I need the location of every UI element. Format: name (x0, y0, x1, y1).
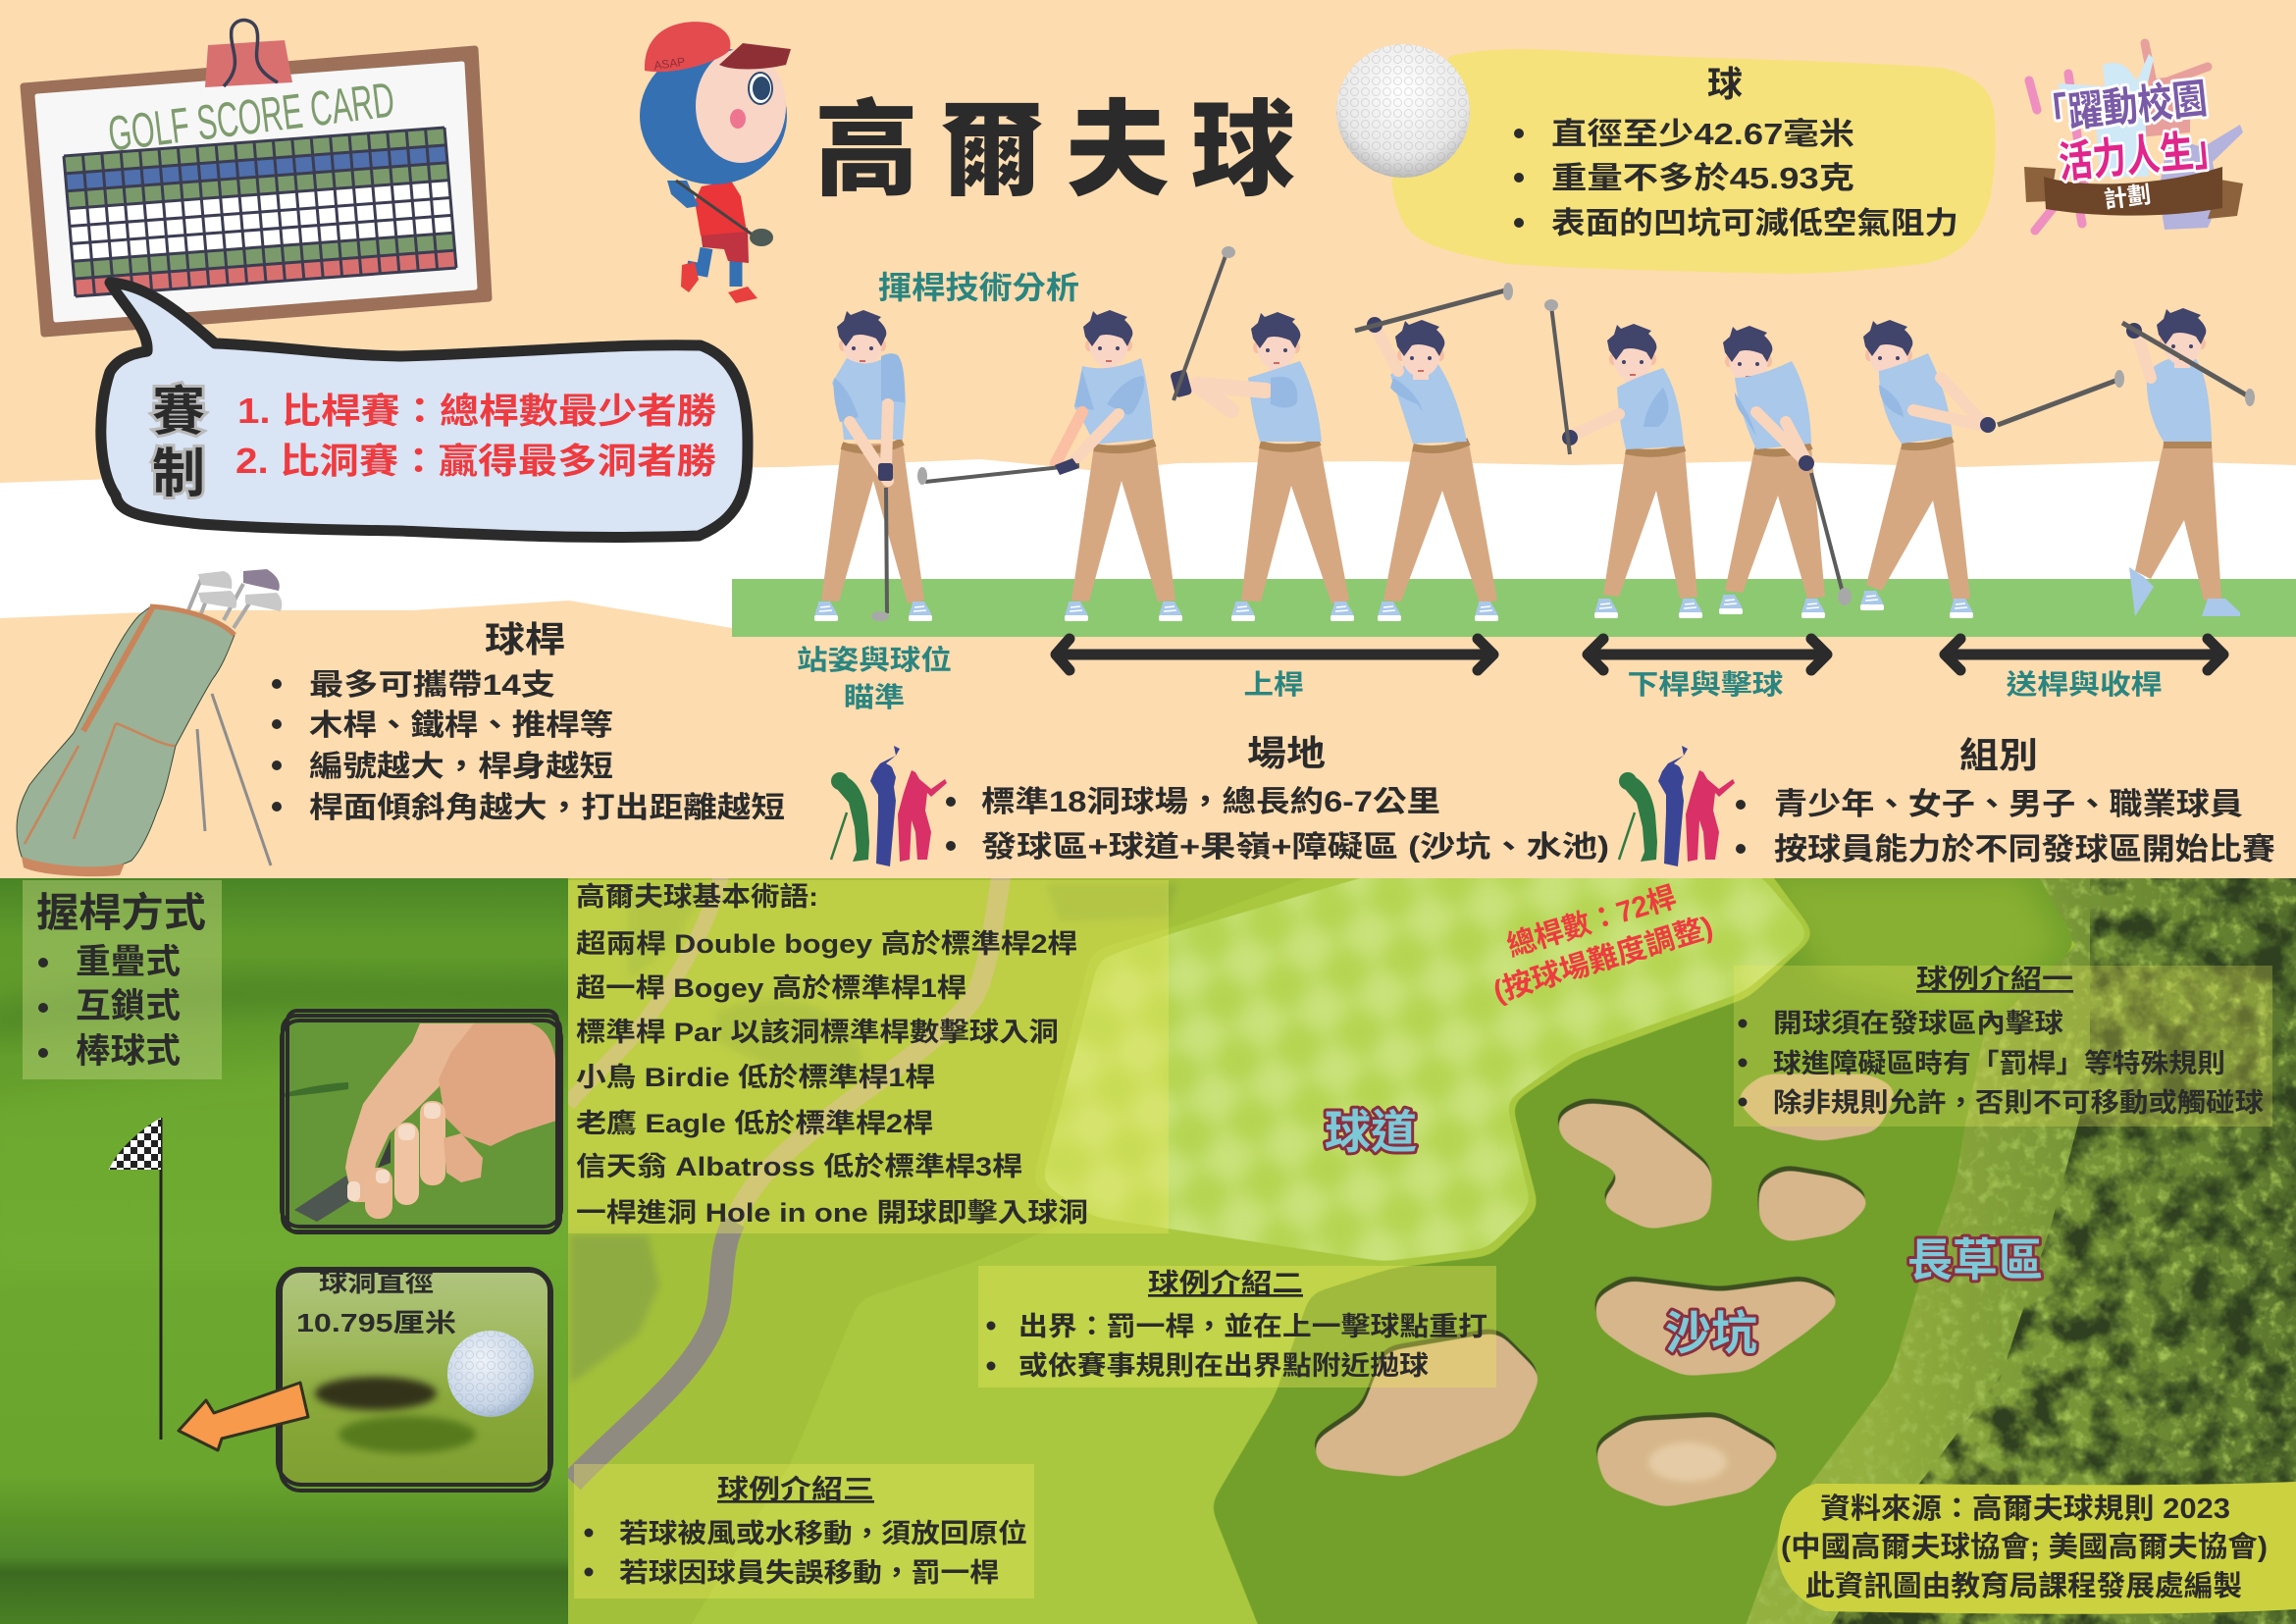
terms: list: 一桿進洞 Hole in one 開球即擊入球洞 (576, 1198, 1088, 1228)
arrow: orange pointer (179, 1383, 308, 1450)
bubble: vertical heading: 賽 (152, 383, 205, 442)
grip: list: 互鎖式 (76, 987, 181, 1025)
categories: list (1736, 787, 2275, 866)
logo: ribbon (2024, 167, 2243, 219)
case 1: heading: 球例介紹一 (1916, 965, 2073, 994)
label: backswing: 上桿 (1244, 669, 1303, 700)
clubs: list: 編號越大，桿身越短 (309, 751, 613, 783)
terms: list: 小鳥 Birdie 低於標準桿1桿 (576, 1063, 935, 1092)
categories: list: 青少年、女子、男子、職業球員 (1774, 787, 2243, 821)
categories: heading: 組別 (1959, 735, 2038, 775)
panel: clubs (272, 619, 785, 824)
ball facts: list: 直徑至少42.67毫米 (1551, 117, 1854, 151)
aerial golf course photo (568, 854, 2296, 1624)
course: list (946, 786, 1609, 864)
aerial: cart path (568, 864, 1003, 1482)
aerial: rough patches (570, 1234, 659, 1384)
label: total strokes: 總桿數：72桿 (1503, 881, 1680, 963)
label: downswing: 下桿與擊球 (1627, 669, 1784, 700)
case 3: list: 若球因球員失誤移動，罰一桿 (619, 1558, 999, 1588)
mascot golfer (640, 22, 791, 303)
arrow: follow-through (1945, 639, 2223, 670)
course: list: 發球區+球道+果嶺+障礙區 (沙坑、水池) (981, 831, 1609, 864)
grip: frame (282, 1011, 561, 1232)
label: fairway: 球道 (1325, 1106, 1417, 1158)
grass strip (732, 579, 2296, 637)
grip: fingers (365, 1168, 392, 1219)
case 1: list: 開球須在發球區內擊球 (1773, 1009, 2063, 1038)
icon: golf bag (17, 569, 282, 876)
source: line 1: 資料來源：高爾夫球規則 2023 (1820, 1493, 2230, 1525)
case 1: list: 球進障礙區時有「罰桿」等特殊規則 (1773, 1049, 2225, 1078)
figure 5: downswing (1544, 299, 1702, 618)
ball facts: list: 表面的凹坑可減低空氣阻力 (1551, 206, 1958, 240)
terms: list: 超兩桿 Double bogey 高於標準桿2桿 (576, 929, 1077, 959)
logo: silhouettes (2029, 43, 2243, 231)
photo: hole diameter (278, 1269, 551, 1491)
terms: list: 標準桿 Par 以該洞標準桿數擊球入洞 (576, 1018, 1059, 1047)
mascot golfer: ASAP (652, 55, 686, 73)
terms: list (576, 929, 1088, 1228)
label: total strokes (1478, 873, 1717, 1009)
case 1: list (1739, 1009, 2264, 1118)
ball facts: yellow blob (1392, 49, 1995, 274)
label: rough: 長草區 (1907, 1234, 2043, 1285)
ball facts: list: 重量不多於45.93克 (1551, 161, 1854, 195)
panel: grip types (23, 880, 222, 1079)
terms: list: 信天翁 Albatross 低於標準桿3桿 (576, 1152, 1022, 1181)
label: stance and aim: 瞄準 (844, 682, 905, 712)
grip: heading: 握桿方式 (36, 890, 206, 935)
panel: rule case 3 (574, 1464, 1034, 1598)
score card: title: GOLF SCORE CARD (105, 72, 397, 162)
grip: list: 棒球式 (76, 1032, 181, 1071)
panel: rule case 2 (978, 1266, 1496, 1388)
grip: list: 重疊式 (76, 943, 181, 981)
categories: list: 按球員能力於不同發球區開始比賽 (1774, 832, 2275, 866)
label: stance and aim: 站姿與球位 (797, 644, 952, 675)
icon: flag (109, 1118, 161, 1440)
course: list: 標準18洞球場，總長約6-7公里 (981, 786, 1440, 818)
score card: clip (205, 20, 292, 87)
score card: grid (64, 128, 456, 296)
grip: list (38, 943, 181, 1071)
case 1: list: 除非規則允許，否則不可移動或觸碰球 (1773, 1087, 2264, 1118)
icon: golfers silhouette (831, 746, 947, 866)
panel: ball facts (1336, 44, 1995, 274)
source: line 2: (中國高爾夫球協會; 美國高爾夫協會) (1781, 1531, 2268, 1563)
terms: list: 超一桿 Bogey 高於標準桿1桿 (576, 973, 966, 1003)
label: bunker: 沙坑 (1665, 1307, 1757, 1359)
bubble: vertical heading: 制 (152, 445, 205, 503)
panel: source note (1777, 1482, 2296, 1614)
figure 7: follow-through (1860, 320, 2124, 618)
logo: programme (2024, 43, 2243, 231)
hole: caption: 球洞直徑 (319, 1270, 434, 1297)
ball facts: list (1514, 117, 1958, 240)
clubs: list: 桿面傾斜角越大，打出距離越短 (309, 792, 785, 824)
grip: left hand (345, 1023, 474, 1202)
figure 8: finish (2122, 308, 2255, 616)
speech bubble: game format (101, 283, 748, 537)
score card: board (24, 49, 489, 334)
heading: swing analysis: 揮桿技術分析 (878, 270, 1079, 305)
course: heading: 場地 (1247, 733, 1326, 773)
aerial: fairway (677, 854, 1815, 1624)
figure 4: top of backswing (1355, 283, 1513, 621)
hole: caption: 10.795厘米 (296, 1308, 456, 1337)
figure 1: stance (814, 310, 932, 621)
case 3: list: 若球被風或水移動，須放回原位 (619, 1518, 1027, 1548)
case 2: heading: 球例介紹二 (1148, 1269, 1303, 1298)
terms: heading: 高爾夫球基本術語: (576, 882, 818, 912)
aerial: forest (1737, 864, 2296, 1624)
aerial: rough around bunkers (1206, 864, 2076, 1624)
panel: score card (24, 20, 489, 334)
case 2: list: 出界：罰一桿，並在上一擊球點重打 (1018, 1312, 1487, 1341)
terms: list: 老鷹 Eagle 低於標準桿2桿 (576, 1109, 933, 1138)
icon: golfers silhouette right (1619, 746, 1735, 866)
left putting green lawn (0, 878, 589, 1624)
logo: plan: 計劃 (2103, 182, 2153, 214)
grip: right hand (439, 1023, 556, 1146)
figure 6: impact (1719, 326, 1852, 618)
grip: club handle (294, 1176, 353, 1222)
panel: course (946, 733, 1609, 864)
case 3: heading: 球例介紹三 (717, 1475, 874, 1504)
panel: categories (1736, 735, 2275, 866)
case 2: list: 或依賽事規則在出界點附近拋球 (1018, 1351, 1429, 1381)
source: line 3: 此資訊圖由教育局課程發展處編製 (1805, 1570, 2242, 1602)
panel: golf terms (568, 880, 1169, 1233)
swing figures (814, 246, 2255, 621)
background: peach and white bands (0, 0, 2296, 883)
bubble: rule 1: 1. 比桿賽：總桿數最少者勝 (237, 391, 716, 431)
label: total strokes: (按球場難度調整) (1489, 911, 1717, 1009)
clubs: list: 木桿、鐵桿、推桿等 (309, 709, 613, 742)
bubble: vertical heading (152, 383, 205, 503)
label: stance and aim (797, 644, 952, 712)
ball facts: heading: 球 (1707, 64, 1743, 104)
clubs: list (272, 669, 785, 824)
case 3: list (585, 1518, 1027, 1588)
photo: grip (282, 1011, 561, 1232)
figure 2: takeaway (917, 310, 1182, 621)
title: 高爾夫球 (814, 93, 1295, 209)
hole: caption (296, 1270, 456, 1337)
bubble: rule 2: 2. 比洞賽：贏得最多洞者勝 (235, 441, 716, 481)
case 2: list (987, 1312, 1487, 1381)
clubs: heading: 球桿 (485, 619, 565, 659)
label: follow-through: 送桿與收桿 (2006, 669, 2163, 700)
logo: name line 1: 「躍動校園 (2031, 76, 2210, 139)
ball facts: golf ball (1336, 44, 1470, 178)
clubs: list: 最多可攜帶14支 (309, 669, 555, 702)
logo: name line 2: 活力人生」 (2057, 125, 2229, 187)
aerial: bunkers (1312, 1074, 1899, 1507)
arrow: downswing (1588, 639, 1827, 670)
panel: rule case 1 (1734, 965, 2272, 1126)
arrow: backswing (1056, 639, 1493, 670)
figure 3: halfway back (1170, 246, 1354, 621)
